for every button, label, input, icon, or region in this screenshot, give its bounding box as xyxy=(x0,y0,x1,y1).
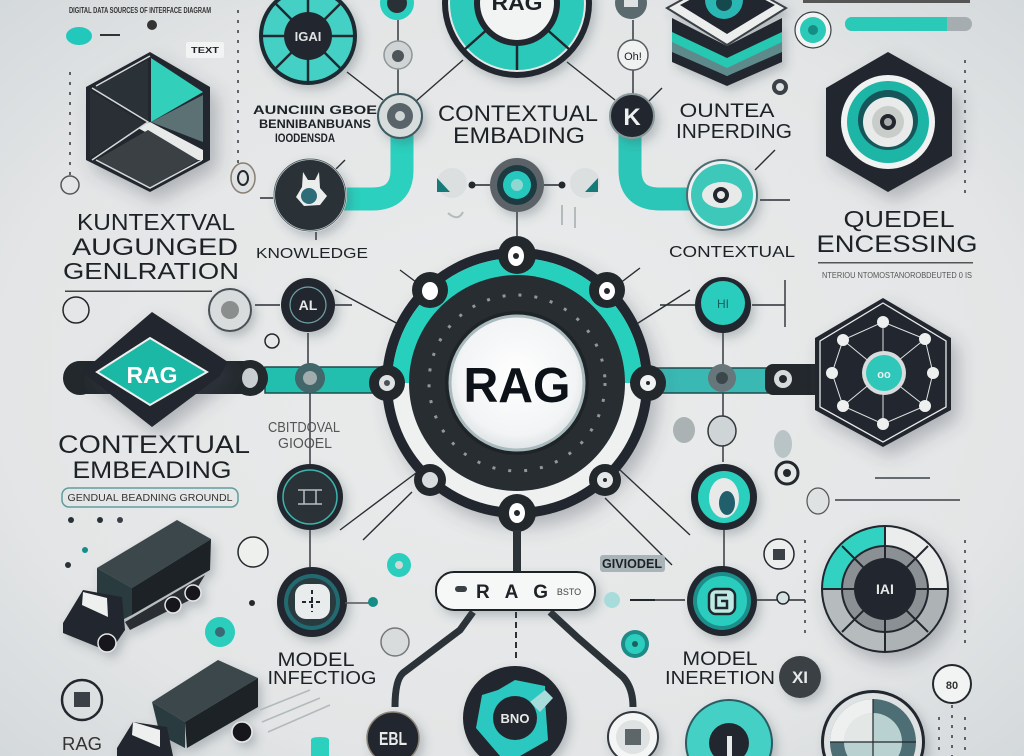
bottom centre dial xyxy=(463,666,567,756)
heading: left xyxy=(63,209,239,292)
top-left hexagon icon xyxy=(86,52,210,192)
heading: contextual embeading xyxy=(58,431,250,507)
bottom small left node xyxy=(367,712,419,756)
heading: top right centre: INPERDING xyxy=(676,121,792,143)
lower right detail lines xyxy=(835,478,960,500)
label: small left centre: CBITDOVAL xyxy=(268,419,340,436)
small text: top left centre: BENNIBANBUANS xyxy=(259,117,371,131)
heading: contextual embeading: GENDUAL BEADNING GROUNDL xyxy=(68,493,233,504)
connector: teal elbow right xyxy=(630,130,700,199)
hub node: upper left xyxy=(412,272,448,308)
node: knowledge xyxy=(274,159,346,231)
top-left dial icon: IGAI xyxy=(295,29,321,44)
label: rag small: RAG xyxy=(62,734,102,754)
node: left elbow top xyxy=(378,94,422,138)
label: small left centre xyxy=(268,419,340,452)
top text strips xyxy=(66,0,972,58)
centre dashed line xyxy=(515,612,517,660)
heading: top centre xyxy=(438,101,598,148)
small text: top left centre xyxy=(253,103,377,145)
teal bottom bar xyxy=(311,737,329,756)
label: small left centre: GIOOEL xyxy=(278,435,332,452)
label: model left: MODEL xyxy=(278,650,354,671)
RAG pill xyxy=(436,572,595,610)
connector: teal elbow left xyxy=(335,130,402,199)
node: left upper: AL xyxy=(299,297,318,313)
bottom small left node: EBL xyxy=(379,729,407,749)
node: left upper xyxy=(209,278,335,332)
heading: left: GENLRATION xyxy=(63,258,239,284)
node: right elbow top xyxy=(610,94,654,138)
RAG diamond badge: RAG xyxy=(126,362,178,388)
hub node: lower left xyxy=(414,464,446,496)
top text strips: DIGITAL DATA SOURCES OF INTERFACE DIAGRAM xyxy=(69,6,211,15)
hub label: RAG xyxy=(464,359,570,413)
label: model left: INFECTIOG xyxy=(268,668,376,688)
heading: top centre: CONTEXTUAL xyxy=(438,101,598,126)
bottom small right node xyxy=(608,712,658,756)
top small nodes xyxy=(380,0,831,70)
bottom centre dial: BNO xyxy=(501,711,529,726)
heading: right: ENCESSING xyxy=(816,231,978,258)
truck icon: lower xyxy=(117,660,258,756)
top small nodes: Oh! xyxy=(624,51,642,63)
heading: right: QUEDEL xyxy=(844,206,955,232)
RAG pill: RAG xyxy=(476,582,548,603)
top-left dial icon xyxy=(259,0,357,85)
horizontal bar: left connector xyxy=(63,360,385,396)
segmented pie chart xyxy=(821,525,949,653)
node: top centre xyxy=(437,158,600,228)
node: left lower one xyxy=(277,464,343,530)
heading: right: NTERIOU NTOMOSTANOROBDEUTED 0 IS xyxy=(822,271,972,280)
node: dark XI badge: XI xyxy=(792,668,808,687)
small accent nodes: 80 xyxy=(946,680,958,692)
hub node: left xyxy=(369,365,405,401)
top RAG dial xyxy=(442,0,592,78)
top-right hexagon icon xyxy=(826,52,952,192)
hub node: right xyxy=(630,365,666,401)
node: contextual xyxy=(686,159,758,231)
label: model right xyxy=(665,649,775,688)
bottom right clock chart xyxy=(821,690,925,756)
RAG pill: BSTO xyxy=(557,587,581,597)
small accent nodes xyxy=(61,79,971,703)
label: model right: MODEL xyxy=(682,649,758,670)
bottom right gauge xyxy=(686,700,772,756)
hub to pill connector xyxy=(513,530,521,571)
node: right upper: HI xyxy=(717,297,729,311)
heading: contextual embeading: EMBEADING xyxy=(72,457,232,484)
small text: top left centre: AUNCIIIN GBOE xyxy=(253,103,377,117)
node: left lower two xyxy=(277,567,347,637)
hub node: top xyxy=(498,236,536,274)
horizontal bar: right connector xyxy=(650,364,825,395)
connector lines xyxy=(255,20,805,600)
heading: left: KUNTEXTVAL xyxy=(77,209,235,235)
small icon: rag emblem xyxy=(62,680,102,720)
top text strips: TEXT xyxy=(191,46,219,55)
hub node: lower right xyxy=(589,464,621,496)
label: model small: GIVIODEL xyxy=(602,556,662,571)
hub node: upper right xyxy=(589,272,625,308)
truck icon: upper xyxy=(63,520,211,652)
top-right layered cube icon xyxy=(667,0,786,86)
hub node: bottom xyxy=(498,494,536,532)
label: model right: INERETION xyxy=(665,668,775,688)
label: contextual: CONTEXTUAL xyxy=(669,244,795,261)
node: dark XI badge xyxy=(779,656,821,698)
network hexagon icon xyxy=(815,298,951,447)
heading: left: AUGUNGED xyxy=(72,234,238,261)
heading: top right centre xyxy=(676,101,792,143)
heading: contextual embeading: CONTEXTUAL xyxy=(58,431,250,459)
label: knowledge: KNOWLEDGE xyxy=(256,245,368,262)
segmented pie chart: IAI xyxy=(876,581,894,597)
node: right lower one xyxy=(691,464,757,530)
central RAG hub xyxy=(369,236,666,532)
RAG diamond badge xyxy=(82,312,228,427)
truck speed lines xyxy=(260,690,330,732)
heading: top right centre: OUNTEA xyxy=(680,101,775,122)
heading: top centre: EMBADING xyxy=(453,123,585,148)
node: right elbow top: K xyxy=(623,104,641,131)
node: right lower two xyxy=(687,566,757,636)
heading: right xyxy=(816,206,978,280)
tree connectors below pill xyxy=(395,612,633,707)
small text: top left centre: IOODENSDA xyxy=(275,131,335,145)
node: right upper xyxy=(695,277,751,333)
network hexagon icon: oo xyxy=(877,369,891,381)
label: model left xyxy=(268,650,376,688)
